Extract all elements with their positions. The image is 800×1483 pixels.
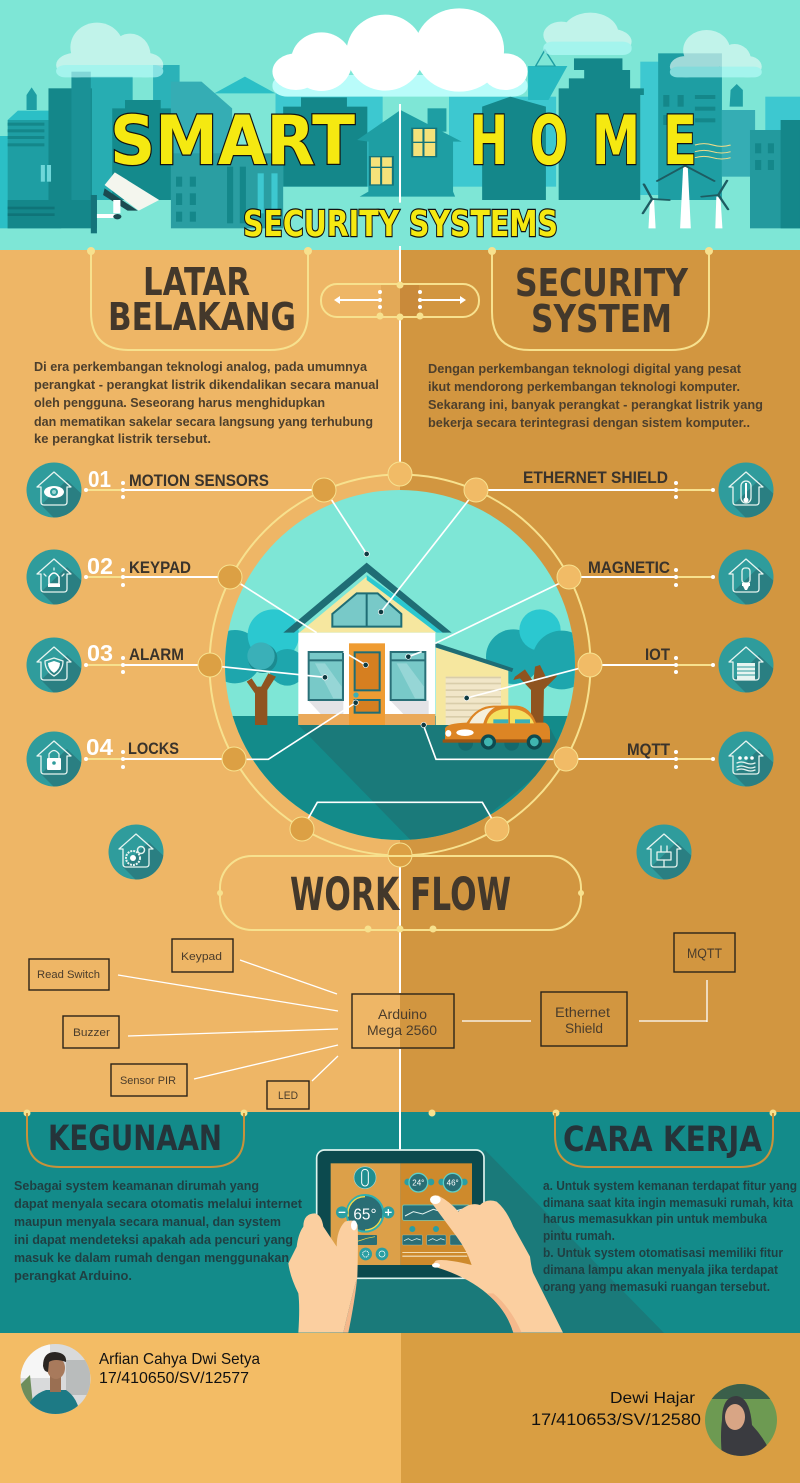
text block: cara kerja (543, 1179, 797, 1294)
icon: light bulb (718, 550, 780, 611)
author: Arfian: 17/410650/SV/12577 (99, 1370, 249, 1387)
numbers: 02 (87, 553, 113, 579)
text block: kegunaan: ini dapat mendeteksi apakah ada pencuri yang (14, 1233, 293, 1247)
text block: latar belakang: Di era perkembangan teknologi analog, pada umumnya (34, 360, 368, 374)
workflow labels: Buzzer (73, 1027, 110, 1039)
author: Dewi: 17/410653/SV/12580 (531, 1410, 701, 1429)
icon: garage door (718, 638, 780, 699)
workflow labels: Sensor PIR (120, 1075, 176, 1087)
text block: latar belakang: oleh pengguna. Seseorang harus menghidupkan (34, 396, 325, 410)
tablet right controls: 46° (447, 1179, 459, 1188)
icon: gears (108, 824, 170, 886)
house (283, 563, 513, 725)
sensor labels: left: KEYPAD (129, 558, 191, 577)
heading: latar belakang: LATAR (143, 260, 250, 305)
title: smart home: O (530, 102, 568, 181)
text block: latar belakang: ke perangkat listrik tersebut. (34, 432, 211, 446)
workflow labels: MQTT (687, 946, 722, 961)
left hand (288, 1213, 358, 1333)
text block: latar belakang (34, 360, 379, 446)
numbers: 04 (86, 734, 113, 760)
author: Dewi: Dewi Hajar (610, 1390, 696, 1407)
workflow labels: Shield (565, 1021, 603, 1036)
tablet right controls: 24° (412, 1179, 424, 1188)
icon: padlock (26, 732, 88, 793)
workflow labels: Keypad (181, 951, 222, 963)
outer ring (210, 474, 590, 856)
text block: security system: bekerja secara terintegrasi dengan sistem komputer.. (428, 416, 750, 430)
text block: security system: Dengan perkembangan teknologi digital yang pesat (428, 362, 742, 376)
numbers: 03 (87, 640, 113, 666)
numbers: 01 (88, 466, 111, 492)
tablet right controls (402, 1173, 469, 1257)
avatar: Dewi (704, 1383, 778, 1457)
text block: latar belakang: perangkat - perangkat listrik dikendalikan secara manual (34, 378, 379, 392)
text block: cara kerja: dimana lampu akan menyala jika terdapat (543, 1263, 779, 1277)
dots along teal band (24, 1110, 776, 1116)
sensor labels: left: MOTION SENSORS (129, 471, 269, 490)
tablet left controls: 65° (353, 1206, 377, 1223)
row connectors: left (84, 481, 324, 769)
heading: latar belakang (108, 260, 296, 340)
heading frame: security system (488, 247, 713, 350)
icon: plug (636, 824, 698, 886)
security camera (97, 172, 159, 219)
subtitle: security systems: SECURITY SYSTEMS (243, 204, 558, 245)
text block: kegunaan: maupun menyala secara manual, dan system (14, 1215, 281, 1229)
work flow frame (217, 856, 584, 932)
title: smart home: E (663, 102, 697, 181)
author: Arfian (99, 1351, 260, 1387)
right tree (486, 609, 575, 723)
text block: security system (428, 362, 763, 430)
workflow labels: Read Switch (37, 969, 100, 981)
icon: shield (26, 638, 88, 699)
text block: cara kerja: orang yang memasuki ruangan tersebut. (543, 1280, 770, 1294)
heading: security system: SYSTEM (531, 297, 672, 342)
avatar: Arfian (20, 1343, 92, 1415)
heading: security system: SECURITY (515, 261, 689, 306)
city skyline illustration (0, 50, 800, 233)
numbers (86, 466, 113, 760)
workflow connectors (118, 960, 707, 1081)
left tree (225, 609, 299, 725)
connector dots (322, 551, 469, 728)
car (443, 706, 550, 751)
title: smart home: H (470, 102, 508, 181)
text block: kegunaan: dapat menyala secara otomatis melalui internet (14, 1197, 303, 1211)
text block: security system: ikut mendorong perkembangan teknologi komputer. (428, 380, 740, 394)
sensor labels: right: MAGNETIC (588, 558, 670, 577)
workflow labels: Arduino (378, 1007, 427, 1022)
title: smart home (110, 102, 697, 181)
heading frame: kegunaan (27, 1113, 244, 1167)
house silhouette in skyline (357, 104, 462, 203)
heading frame: latar belakang (87, 247, 312, 350)
text block: cara kerja: pintu rumah. (543, 1229, 615, 1243)
sensor labels: left: ALARM (129, 645, 184, 664)
connector lines (222, 500, 579, 818)
text block: kegunaan: Sebagai system keamanan dirumah yang (14, 1179, 259, 1193)
clouds (56, 8, 762, 97)
icon: eye (26, 462, 88, 524)
title: smart home: SMART (110, 102, 356, 181)
sensor labels: right (523, 468, 671, 759)
ring nodes (198, 462, 602, 867)
text block: kegunaan: masuk ke dalam rumah dengan menggunakan (14, 1251, 289, 1265)
center arrows pill (321, 282, 479, 320)
author: Dewi (531, 1390, 701, 1429)
workflow labels: Ethernet (555, 1005, 610, 1020)
workflow labels (37, 946, 722, 1102)
heading: kegunaan: KEGUNAAN (48, 1119, 222, 1159)
heading: latar belakang: BELAKANG (108, 295, 296, 340)
workflow labels: LED (278, 1090, 298, 1102)
title: smart home: M (592, 102, 640, 181)
text block: kegunaan: perangkat Arduino. (14, 1269, 132, 1283)
tablet with hands (288, 1150, 563, 1333)
text block: cara kerja: b. Untuk system otomatisasi memiliki fitur (543, 1246, 783, 1260)
icon: siren (26, 550, 88, 611)
heading: cara kerja: CARA KERJA (563, 1120, 762, 1160)
sensor labels: left: LOCKS (128, 739, 179, 758)
tablet left controls (336, 1167, 394, 1260)
workflow diagram (29, 933, 735, 1109)
wind turbines (643, 144, 731, 228)
sensor labels: right: MQTT (627, 740, 671, 759)
row connectors: right (476, 481, 715, 769)
house scene in circle (222, 490, 578, 840)
workflow labels: Mega 2560 (367, 1023, 437, 1038)
heading: work flow: WORK FLOW (290, 868, 511, 921)
tablet shadow (310, 1150, 664, 1333)
heading frame: cara kerja (555, 1113, 773, 1167)
text block: latar belakang: dan mematikan sakelar secara langsung yang terhubung (34, 415, 373, 429)
heading: security system (515, 261, 689, 342)
text block: kegunaan (14, 1179, 303, 1283)
text block: security system: Sekarang ini, banyak perangkat - perangkat listrik yang (428, 398, 763, 412)
icon: thermometer (718, 462, 780, 524)
workflow boxes (29, 933, 735, 1109)
author: Arfian: Arfian Cahya Dwi Setya (99, 1351, 260, 1368)
right hand (430, 1195, 563, 1333)
sensor labels: right: ETHERNET SHIELD (523, 468, 668, 487)
central vertical line (399, 246, 401, 1150)
sensor labels: right: IOT (645, 645, 671, 664)
sensor labels: left (128, 471, 269, 758)
icon: rain and waves (718, 732, 780, 793)
text block: cara kerja: harus memasukkan pin untuk membuka (543, 1212, 768, 1226)
